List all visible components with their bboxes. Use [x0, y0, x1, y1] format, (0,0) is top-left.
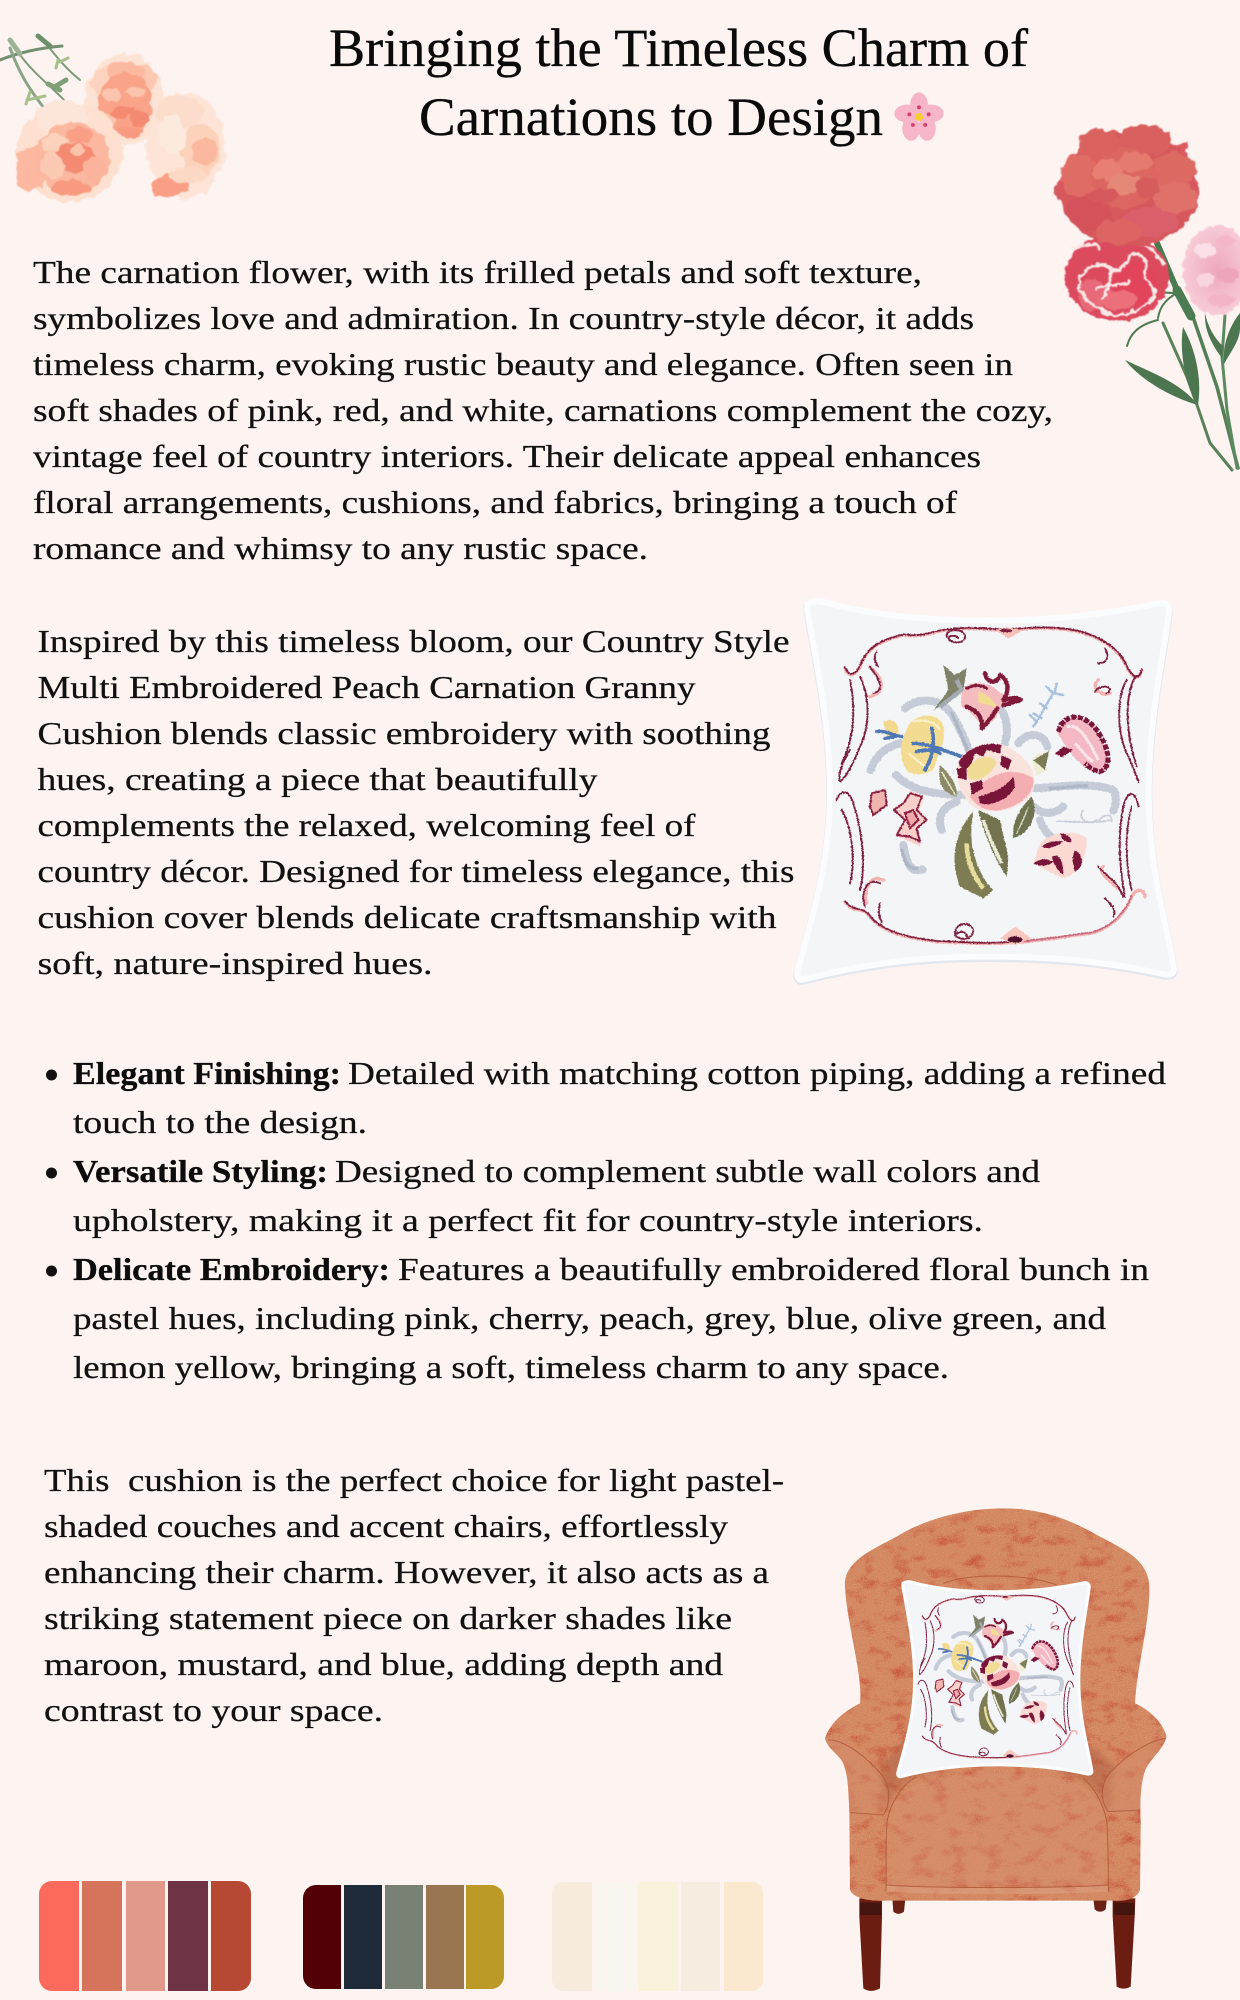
paragraph: styling suggestion: enhancing their charm. However, it also acts as a [44, 1554, 769, 1590]
paragraph: styling suggestion: maroon, mustard, and blue, adding depth and [44, 1646, 723, 1682]
chair upholstery [820, 1503, 1173, 1907]
paragraph: carnation introduction: soft shades of pink, red, and white, carnations complement the cozy, [33, 392, 1053, 428]
bullet: versatile styling: upholstery, making it a perfect fit for country-style interiors. [73, 1202, 983, 1238]
paragraph: styling suggestion: This cushion is the perfect choice for light pastel- [44, 1462, 784, 1498]
paragraph: cushion description: Multi Embroidered Peach Carnation Granny [38, 669, 696, 705]
top bloom [85, 54, 165, 146]
bullet: versatile styling: Versatile Styling: [73, 1153, 328, 1189]
bullet: delicate embroidery: Delicate Embroidery: [73, 1251, 390, 1287]
colour palette: dark accents [303, 1885, 504, 1989]
colour palette: creams [552, 1882, 763, 1991]
colour palette: warm reds [39, 1881, 251, 1991]
bullet: delicate embroidery: lemon yellow, bringing a soft, timeless charm to any space. [73, 1349, 949, 1385]
paragraph: cushion description: Cushion blends classic embroidery with soothing [38, 715, 770, 751]
paragraph: carnation introduction: floral arrangements, cushions, and fabrics, bringing a touch of [33, 484, 957, 520]
paragraph: carnation introduction [33, 254, 1053, 566]
cushion on chair [898, 1582, 1092, 1777]
bullet: delicate embroidery: Features a beautifully embroidered floral bunch in [398, 1251, 1149, 1287]
chair legs [859, 1898, 1135, 1991]
left bloom [15, 100, 123, 202]
bullet list: cushion features [46, 1055, 1166, 1385]
paragraph: carnation introduction: symbolizes love and admiration. In country-style décor, it adds [33, 300, 974, 336]
title [329, 18, 1028, 147]
paragraph: styling suggestion [44, 1462, 784, 1728]
paragraph: styling suggestion: striking statement piece on darker shades like [44, 1600, 732, 1636]
right bloom [147, 93, 225, 199]
bullet: versatile styling [46, 1153, 1040, 1238]
paragraph: cushion description: country décor. Designed for timeless elegance, this [38, 853, 794, 889]
title: Bringing the Timeless Charm of [329, 18, 1028, 78]
paragraph: styling suggestion: contrast to your space. [44, 1692, 383, 1728]
bullet: delicate embroidery: pastel hues, including pink, cherry, peach, grey, blue, olive green, and [73, 1300, 1106, 1336]
bullet: elegant finishing: touch to the design. [73, 1104, 367, 1140]
paragraph: cushion description: cushion cover blends delicate craftsmanship with [38, 899, 776, 935]
bullet: elegant finishing: Elegant Finishing: [73, 1055, 341, 1091]
paragraph: carnation introduction: timeless charm, evoking rustic beauty and elegance. Often seen in [33, 346, 1013, 382]
bullet: elegant finishing [46, 1055, 1166, 1140]
paragraph: styling suggestion: shaded couches and accent chairs, effortlessly [44, 1508, 728, 1544]
illustration: embroidered cushion [797, 601, 1174, 981]
illustration: peach carnations [0, 36, 225, 202]
illustration: red and pink carnations [1056, 124, 1240, 470]
paragraph: cushion description: soft, nature-inspired hues. [38, 945, 432, 981]
bullet: elegant finishing: Detailed with matching cotton piping, adding a refined [348, 1055, 1166, 1091]
bullet: delicate embroidery [46, 1251, 1149, 1385]
paragraph: cushion description: Inspired by this timeless bloom, our Country Style [38, 623, 790, 659]
paragraph: cushion description: complements the relaxed, welcoming feel of [38, 807, 696, 843]
paragraph: carnation introduction: romance and whimsy to any rustic space. [33, 530, 648, 566]
paragraph: carnation introduction: The carnation flower, with its frilled petals and soft texture, [33, 254, 922, 290]
illustration: armchair with cushion [820, 1503, 1173, 1991]
paragraph: cushion description [38, 623, 794, 981]
bullet: versatile styling: Designed to complement subtle wall colors and [335, 1153, 1040, 1189]
title: Carnations to Design [419, 87, 883, 147]
icon: cherry blossom [894, 92, 944, 141]
paragraph: carnation introduction: vintage feel of country interiors. Their delicate appeal enhances [33, 438, 981, 474]
paragraph: cushion description: hues, creating a piece that beautifully [38, 761, 598, 797]
